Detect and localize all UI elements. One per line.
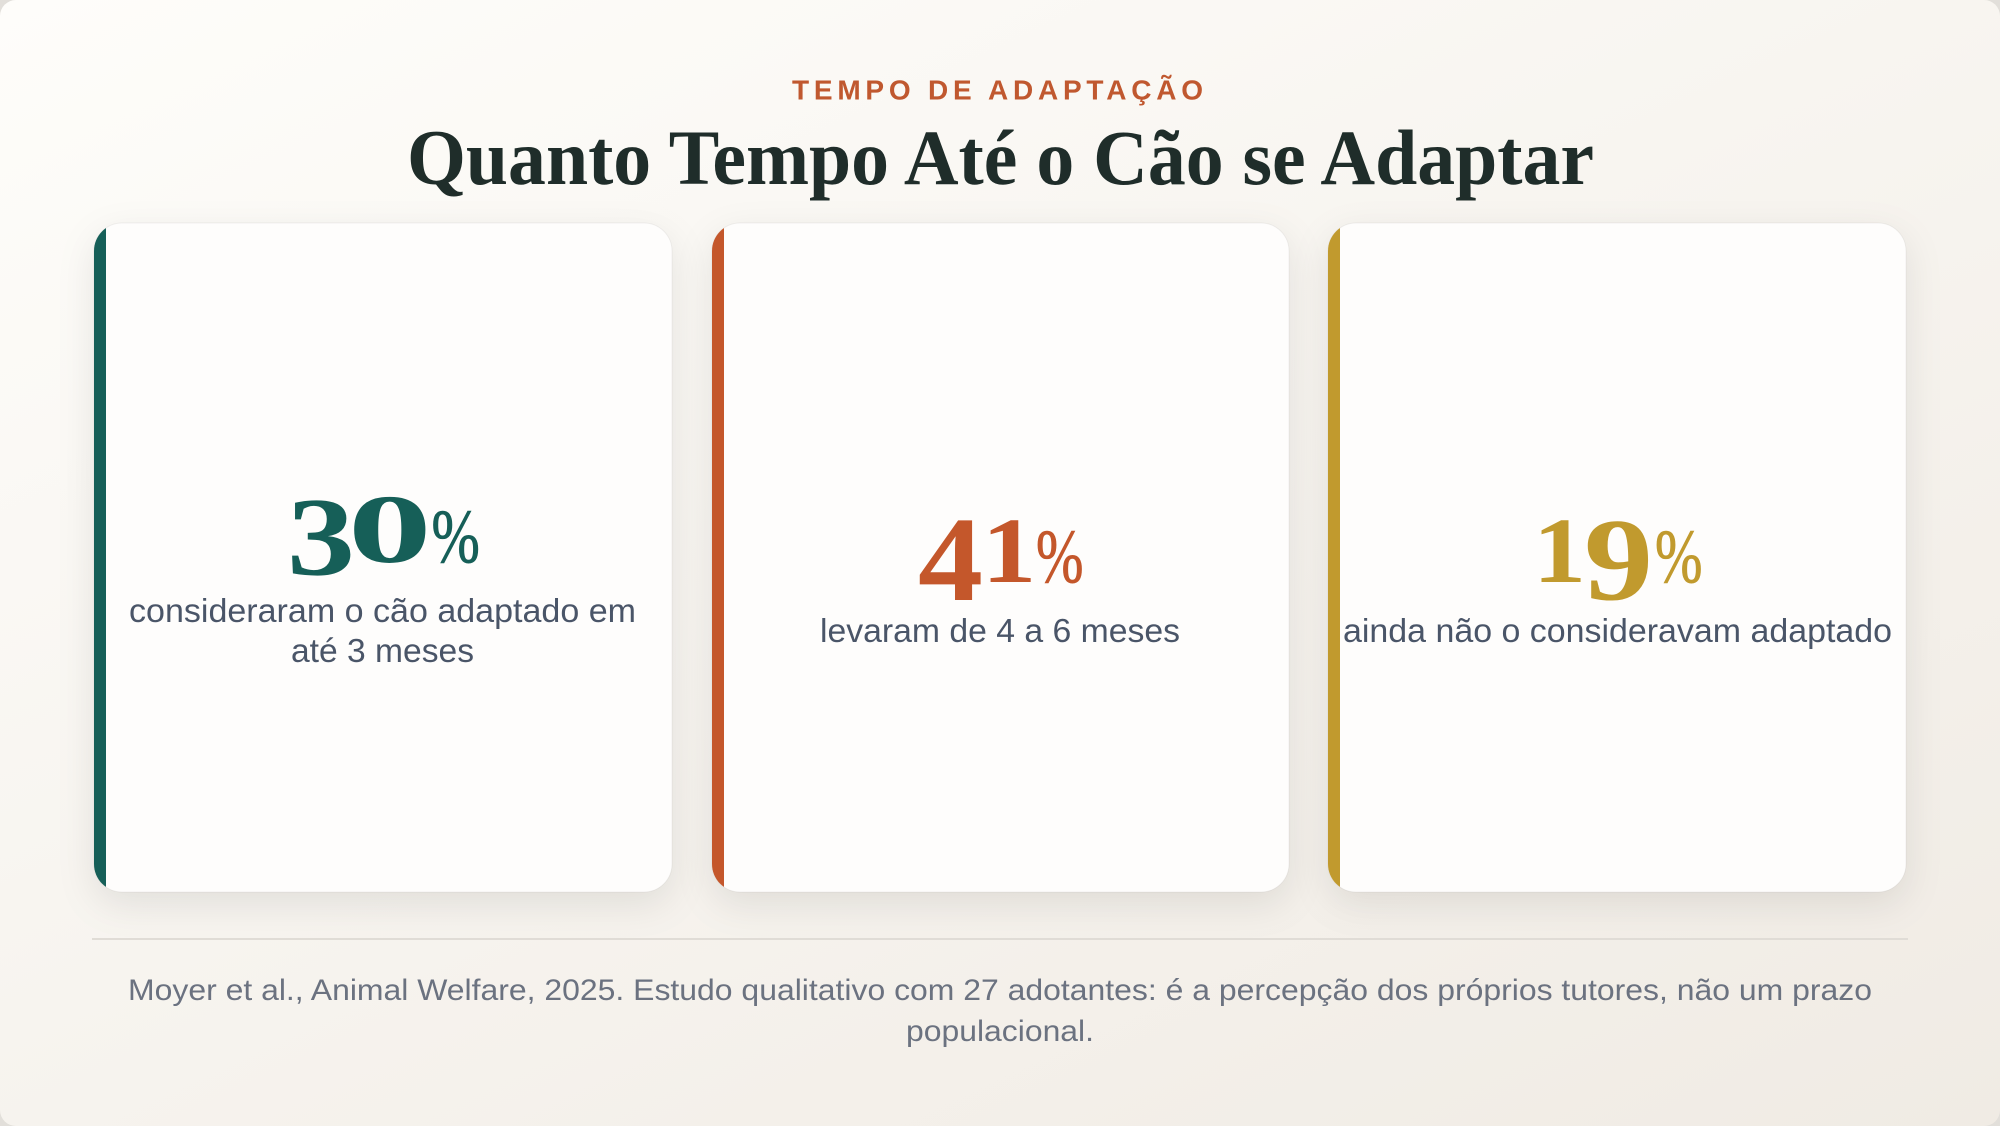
stat 19% [1533,495,1702,625]
stat 30%: 3 [287,475,355,599]
description: ainda não o consideravam adaptado [1343,612,1892,649]
stat 41%: % [1036,514,1083,599]
description: até 3 meses [291,632,474,669]
source footnote: populacional. [906,1015,1094,1048]
panel: 30 percent [94,223,672,892]
source footnote: Moyer et al., Animal Welfare, 2025. Estudo qualitativo com 27 adotantes: é a percepção dos próprios tutores, não um prazo [128,974,1872,1007]
card background [712,223,1289,892]
stat 19%: % [1655,514,1702,599]
title: Quanto Tempo Até o Cão se Adaptar [407,114,1594,201]
description [129,592,636,669]
card background [94,223,672,892]
stat 19%: 9 [1584,495,1653,625]
description: levaram de 4 a 6 meses [820,612,1180,649]
card background [1328,223,1906,892]
stat 41% [918,493,1083,627]
source footnote [128,974,1872,1048]
accent bar teal [94,223,106,892]
panel: 19 percent [1328,223,1906,892]
description: consideraram o cão adaptado em [129,592,636,629]
eyebrow label: TEMPO DE ADAPTAÇÃO [792,74,1203,106]
stat 30%: 0 [348,474,432,583]
panel: 41 percent [712,223,1289,892]
accent bar orange [712,223,724,892]
accent bar gold [1328,223,1340,892]
stat 41%: 1 [982,499,1036,602]
stat 30% [287,474,480,599]
stat 30%: % [432,495,480,579]
stat 19%: 1 [1533,499,1586,603]
stat 41%: 4 [918,493,983,627]
